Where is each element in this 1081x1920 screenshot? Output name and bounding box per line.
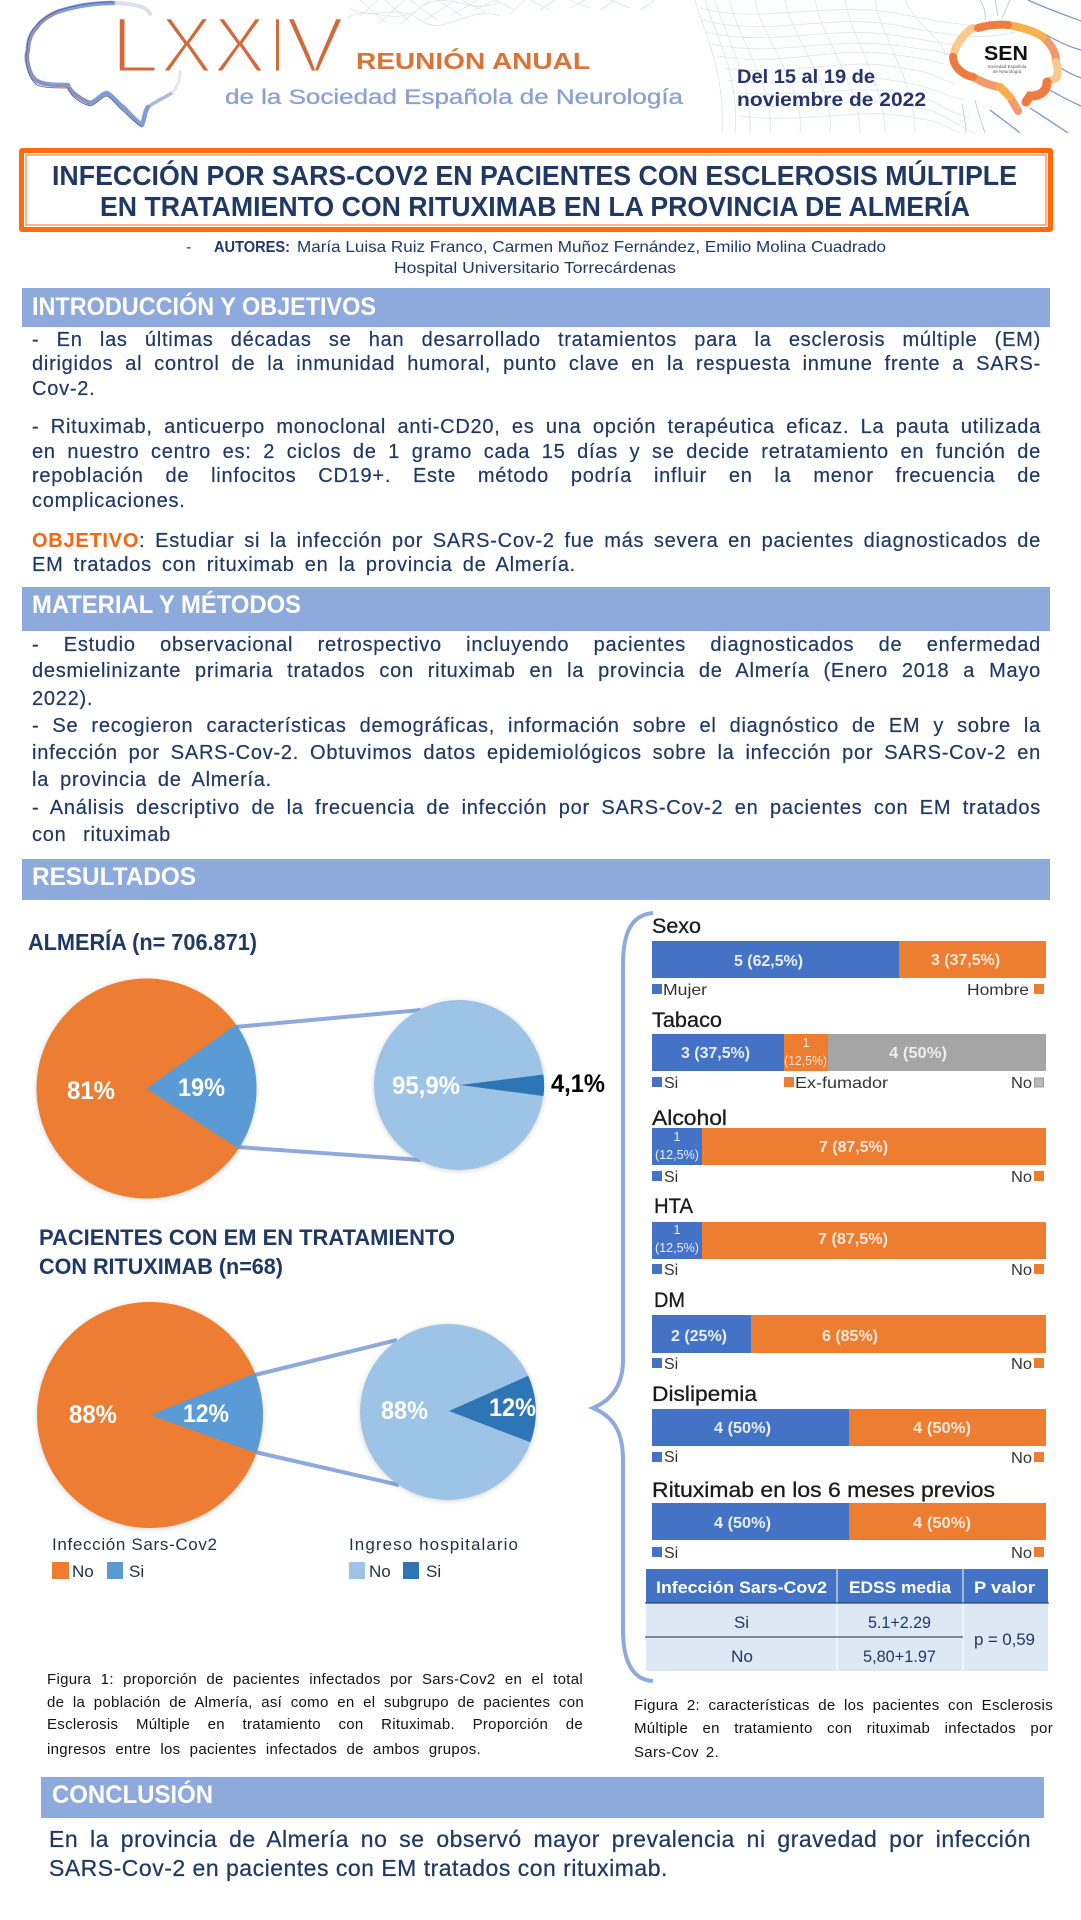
text: Esclerosis Múltiple en tratamiento con Rituximab. Proporción de (47, 1716, 583, 1733)
caption: figura 1 (47, 1671, 584, 1758)
authors: - (186, 239, 191, 256)
legend: infección (52, 1535, 217, 1581)
bar: tabaco: 4 (50%) (889, 1045, 947, 1062)
heading: introducción y objetivos: INTRODUCCIÓN Y OBJETIVOS (32, 291, 376, 321)
heading: pacientes con EM: PACIENTES CON EM EN TRATAMIENTO (39, 1225, 455, 1250)
bar: sexo: Mujer (663, 982, 708, 999)
chart: pacientes pie of pie: 12% (183, 1400, 229, 1428)
legend: infección: Si (129, 1562, 144, 1581)
authors (186, 239, 886, 277)
text: SARS-Cov-2 en pacientes con EM tratados con rituximab. (49, 1855, 668, 1881)
bar: dislipemia: 4 (50%) (913, 1420, 971, 1437)
text: Figura 2: características de los pacientes con Esclerosis (634, 1697, 1053, 1714)
logo: SEN: SEN (984, 43, 1028, 65)
caption: figura 2 (634, 1697, 1053, 1761)
legend: ingreso hospitalario: Ingreso hospitalario (349, 1535, 518, 1554)
event number: X (160, 0, 213, 89)
bar: sexo: Sexo (652, 915, 701, 938)
chart: almería pie of pie: 81% (67, 1077, 115, 1105)
bar: HTA: (12,5%) (655, 1240, 699, 1255)
bar: tabaco: (12,5%) (784, 1053, 827, 1068)
text: Figura 1: proporción de pacientes infectados por Sars-Cov2 en el total (47, 1671, 583, 1688)
bar: tabaco: 1 (802, 1035, 810, 1050)
table: EDSS: P valor (974, 1578, 1035, 1597)
text: complicaciones. (32, 490, 186, 512)
chart: almería pie of pie: 4,1% (551, 1070, 605, 1098)
bar: rituximab: Rituximab en los 6 meses previos (652, 1479, 995, 1502)
text: - Estudio observacional retrospectivo incluyendo pacientes diagnosticados de enfermedad (32, 634, 1041, 656)
bar: dislipemia: Si (664, 1449, 678, 1466)
bar: rituximab: 4 (50%) (714, 1515, 771, 1532)
title box (19, 148, 1053, 232)
heading: resultados: RESULTADOS (32, 863, 196, 891)
title box: INFECCIÓN POR SARS-COV2 EN PACIENTES CON ESCLEROSIS MÚLTIPLE (52, 160, 1017, 191)
event number: I (270, 0, 285, 89)
bar: sexo (652, 915, 1046, 999)
heading: conclusión (41, 1777, 1044, 1818)
heading: material y métodos: MATERIAL Y MÉTODOS (32, 590, 301, 619)
bar: alcohol: 1 (673, 1129, 681, 1144)
bar: rituximab: 4 (50%) (913, 1515, 971, 1532)
table: EDSS: 5,80+1.97 (863, 1647, 936, 1666)
text: - En las últimas décadas se han desarrollado tratamientos para la esclerosis múltiple (EM) (32, 329, 1041, 351)
bar: DM: Si (664, 1356, 678, 1373)
bar: HTA (652, 1195, 1046, 1279)
text: Sars-Cov 2. (634, 1744, 719, 1761)
bar: tabaco: No (1011, 1075, 1032, 1092)
heading: resultados (22, 859, 1050, 900)
text: En la provincia de Almería no se observó mayor prevalencia ni gravedad por infección (49, 1826, 1031, 1852)
text: repoblación de linfocitos CD19+. Este método podría influir en la menor frecuencia de (32, 465, 1041, 487)
icon: brain outline (26, 2, 180, 127)
event number: V (286, 0, 344, 89)
text: material y métodos (32, 634, 1041, 846)
event dates: Del 15 al 19 de (737, 67, 875, 88)
bar: alcohol (652, 1107, 1046, 1186)
chart: pacientes pie of pie: 88% (69, 1401, 117, 1429)
chart: pacientes pie of pie: 88% (381, 1397, 428, 1425)
event number: L (111, 0, 159, 89)
bar: DM: 6 (85%) (822, 1328, 878, 1345)
text: de la población de Almería, así como en el subgrupo de pacientes con (47, 1694, 584, 1711)
authors: AUTORES: (214, 239, 290, 256)
text: dirigidos al control de la inmunidad humoral, punto clave en la respuesta inmune frente a SARS- (32, 353, 1041, 375)
text: desmielinizante primaria tratados con rituximab en la provincia de Almería (Enero 2018 a Mayo (32, 660, 1041, 682)
heading: pacientes con EM: CON RITUXIMAB (n=68) (39, 1254, 283, 1279)
bar: HTA: No (1011, 1262, 1032, 1279)
bar: HTA: 1 (673, 1222, 681, 1237)
logo: SEN: de Neurología (993, 69, 1022, 74)
text: - Análisis descriptivo de la frecuencia de infección por SARS-Cov-2 en pacientes con EM tratados (32, 797, 1041, 819)
bar: alcohol: (12,5%) (655, 1147, 699, 1162)
text: - Rituximab, anticuerpo monoclonal anti-CD20, es una opción terapéutica eficaz. La pauta utilizada (32, 416, 1041, 438)
event dates (737, 67, 926, 111)
brace (593, 913, 653, 1681)
event number: X (213, 0, 266, 89)
chart: almería pie of pie: 95,9% (392, 1072, 460, 1100)
bar: rituximab: Si (664, 1545, 678, 1562)
text: ingresos entre los pacientes infectados de ambos grupos. (47, 1741, 481, 1758)
bar: DM: DM (654, 1289, 685, 1312)
event name: REUNIÓN ANUAL (356, 47, 590, 74)
bar: DM: 2 (25%) (671, 1328, 727, 1345)
bar: alcohol: Alcohol (652, 1107, 727, 1130)
logo: SEN (953, 25, 1058, 111)
chart: pacientes pie of pie (37, 1302, 536, 1528)
bar: HTA: HTA (654, 1195, 693, 1218)
bar: dislipemia: No (1011, 1450, 1032, 1467)
text: Cov-2. (32, 378, 95, 400)
bar: dislipemia (652, 1383, 1046, 1467)
bar: alcohol: Si (664, 1169, 678, 1186)
table: EDSS: p = 0,59 (974, 1630, 1035, 1649)
bar: HTA: 7 (87,5%) (818, 1231, 888, 1248)
authors: María Luisa Ruiz Franco, Carmen Muñoz Fernández, Emilio Molina Cuadrado (297, 239, 886, 256)
bar: dislipemia: Dislipemia (652, 1383, 757, 1406)
text: en nuestro centro es: 2 ciclos de 1 gramo cada 15 días y se decide retratamiento en función de (32, 441, 1041, 463)
heading: almería: ALMERÍA (n= 706.871) (28, 928, 257, 955)
bar: sexo: Hombre (967, 982, 1029, 999)
event dates: noviembre de 2022 (737, 90, 926, 111)
text: OBJETIVO: Estudiar si la infección por SARS-Cov-2 fue más severa en pacientes diagnosticados de (32, 530, 1041, 552)
text: la provincia de Almería. (32, 769, 272, 791)
legend: ingreso hospitalario (349, 1535, 518, 1581)
legend: ingreso hospitalario: Si (426, 1562, 441, 1581)
table: EDSS: No (731, 1647, 753, 1666)
bar: tabaco (652, 1009, 1046, 1092)
authors: Hospital Universitario Torrecárdenas (394, 260, 676, 277)
chart: almería pie of pie (36, 978, 605, 1198)
table: EDSS: EDSS media (849, 1578, 952, 1597)
text: con rituximab (32, 824, 171, 846)
heading: introducción y objetivos (22, 288, 1050, 327)
legend: infección: No (72, 1562, 94, 1581)
bar: alcohol: 7 (87,5%) (819, 1139, 888, 1156)
chart: almería pie of pie: 19% (178, 1074, 225, 1102)
bar: sexo: 3 (37,5%) (931, 952, 1000, 969)
bar: rituximab (652, 1479, 1046, 1562)
logo: SEN: Sociedad Española (988, 64, 1027, 69)
event number (111, 0, 344, 89)
table: EDSS: 5.1+2.29 (868, 1613, 931, 1632)
table: EDSS: Infección Sars-Cov2 (656, 1578, 827, 1597)
header banner (26, 0, 1081, 133)
heading: conclusión: CONCLUSIÓN (52, 1779, 213, 1809)
text: conclusión (49, 1826, 1031, 1882)
text: - Se recogieron características demográficas, información sobre el diagnóstico de EM y sobre la (32, 715, 1041, 737)
bar: rituximab: No (1011, 1545, 1032, 1562)
text: Múltiple en tratamiento con rituximab infectados por (634, 1720, 1053, 1737)
bar: DM: No (1011, 1356, 1032, 1373)
bar: tabaco: Ex-fumador (795, 1075, 889, 1092)
text: introducción y objetivos (32, 329, 1041, 576)
bar: DM (652, 1289, 1046, 1373)
bar: tabaco: 3 (37,5%) (681, 1045, 750, 1062)
title box: EN TRATAMIENTO CON RITUXIMAB EN LA PROVINCIA DE ALMERÍA (100, 191, 970, 222)
chart: pacientes pie of pie: 12% (489, 1394, 536, 1422)
bar: tabaco: Si (664, 1075, 678, 1092)
bar: dislipemia: 4 (50%) (714, 1420, 771, 1437)
heading: material y métodos (22, 587, 1050, 631)
table: EDSS: Si (734, 1613, 749, 1632)
bar: alcohol: No (1011, 1169, 1032, 1186)
text: infección por SARS-Cov-2. Obtuvimos datos epidemiológicos sobre la infección por SARS-Cov-2 en (32, 742, 1041, 764)
heading: pacientes con EM (39, 1225, 455, 1279)
legend: ingreso hospitalario: No (369, 1562, 391, 1581)
bar: tabaco: Tabaco (652, 1009, 722, 1032)
text: 2022). (32, 688, 93, 710)
table: EDSS (645, 1569, 1049, 1671)
bar: HTA: Si (664, 1262, 678, 1279)
legend: infección: Infección Sars-Cov2 (52, 1535, 217, 1554)
text: EM tratados con rituximab en la provincia de Almería. (32, 554, 576, 576)
society name: de la Sociedad Española de Neurología (225, 86, 683, 109)
bar: sexo: 5 (62,5%) (734, 953, 803, 970)
